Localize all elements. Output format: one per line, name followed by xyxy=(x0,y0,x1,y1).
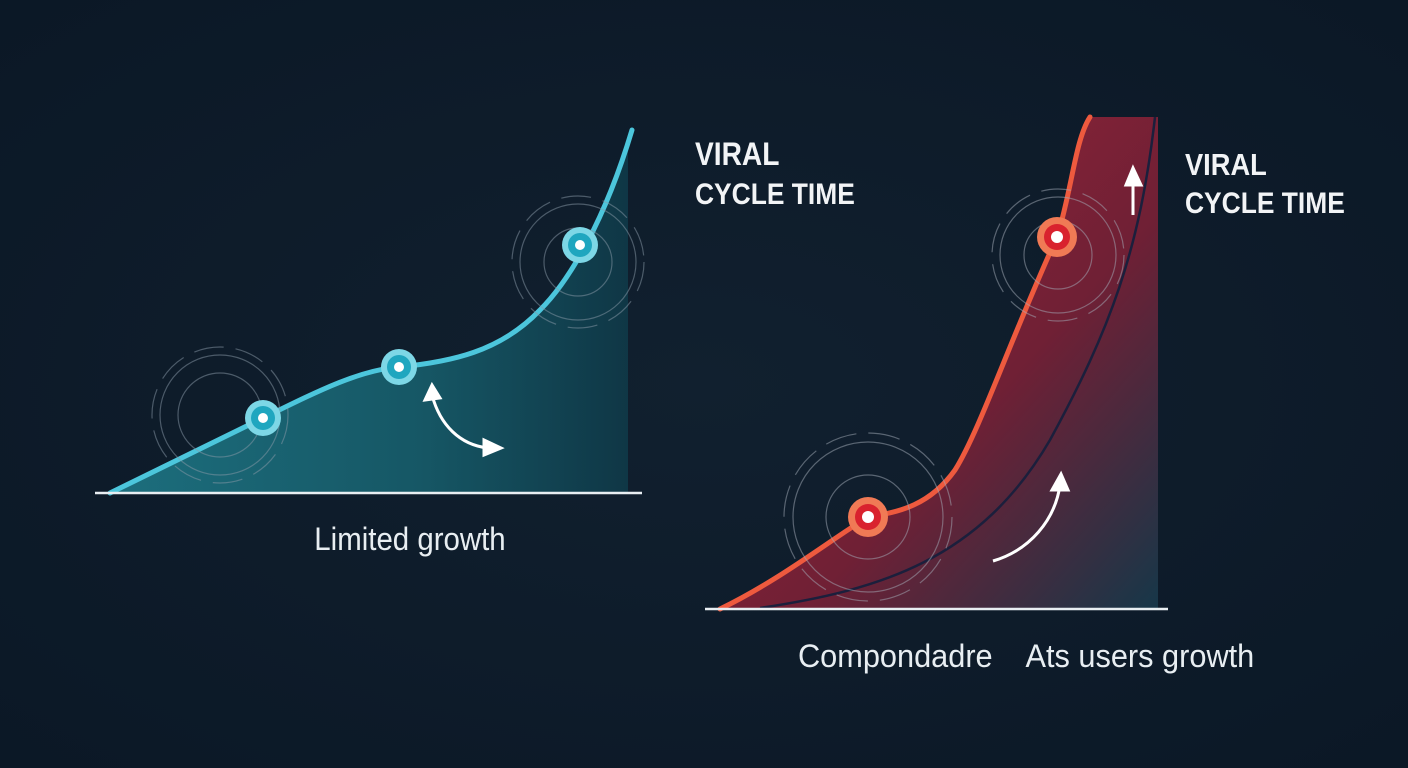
arrow: curved double xyxy=(425,385,501,455)
heading: viral cycle time right xyxy=(1185,148,1345,219)
labels: right chart xyxy=(798,638,1254,674)
baseline xyxy=(95,492,642,494)
growth line xyxy=(720,117,1090,609)
baseline xyxy=(705,608,1168,610)
growth line xyxy=(110,130,632,493)
heading: viral cycle time left: CYCLE TIME xyxy=(695,176,855,210)
data points xyxy=(245,227,598,436)
left chart: limited growth xyxy=(95,130,644,493)
ripple rings xyxy=(152,196,644,483)
area fill xyxy=(720,117,1158,609)
heading: viral cycle time left: VIRAL xyxy=(695,137,779,172)
labels: right chart: Compondadre xyxy=(798,638,993,674)
label: limited growth: Limited growth xyxy=(314,521,506,557)
arrows xyxy=(993,168,1141,561)
secondary curve xyxy=(760,117,1155,608)
area fill xyxy=(110,140,628,493)
ripple rings xyxy=(784,189,1124,601)
right chart: compounding growth xyxy=(705,117,1168,609)
heading: viral cycle time left xyxy=(695,137,855,210)
labels: right chart: Ats users growth xyxy=(1026,638,1254,674)
data points xyxy=(848,217,1077,537)
heading: viral cycle time right: VIRAL xyxy=(1185,148,1267,182)
heading: viral cycle time right: CYCLE TIME xyxy=(1185,185,1345,219)
